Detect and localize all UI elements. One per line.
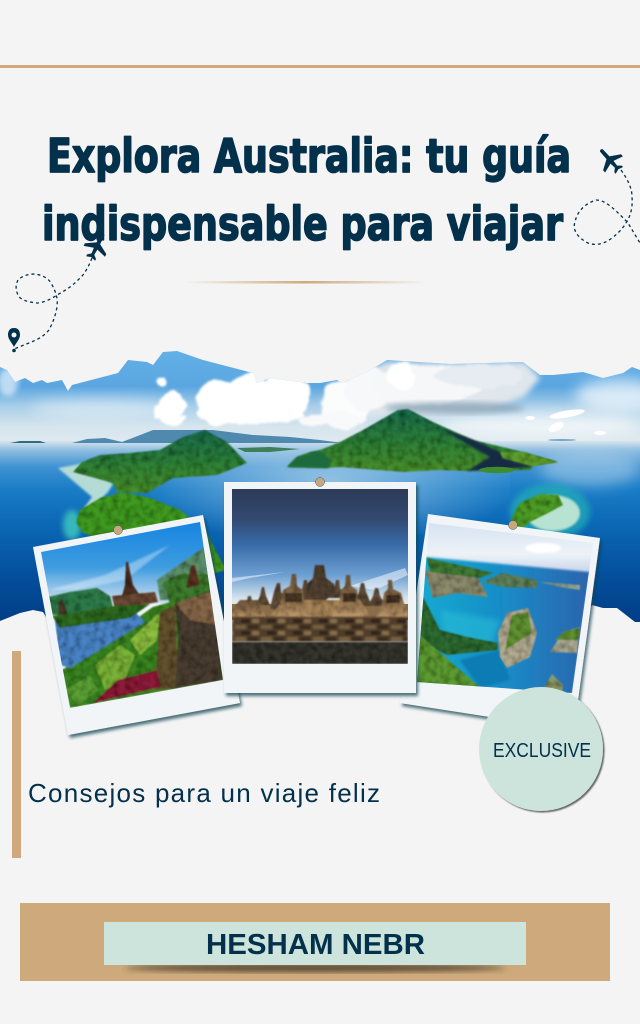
icon: right plane with dotted route: [574, 142, 640, 244]
left island with sand spit: [58, 430, 247, 540]
photo sky: [232, 489, 408, 604]
title divider: [185, 281, 427, 284]
photo sky: [425, 523, 593, 574]
photo card: sea cliffs: [400, 514, 600, 730]
badge: exclusive: [479, 687, 603, 811]
photo sky: [41, 522, 212, 604]
front island: [75, 492, 224, 574]
photo back stupas: [256, 580, 386, 612]
photo foliage highlights: [95, 645, 135, 690]
photo lattice holes: [285, 593, 400, 603]
author banner: [20, 903, 610, 981]
photo foliage base: [62, 590, 225, 708]
sea: [0, 441, 640, 631]
pin: [114, 526, 122, 534]
small reef island: [510, 484, 590, 540]
photo stupa base fill: [232, 604, 408, 620]
photo floor: [232, 642, 408, 664]
photo sea stack: [498, 608, 537, 668]
photo brick wall: [232, 617, 408, 642]
sky: [0, 345, 640, 445]
author banner: HESHAM NEBR: [206, 929, 425, 961]
accent bar: [12, 651, 21, 858]
photo hills and pagodas: [48, 588, 115, 615]
icon: left plane with dotted route and pin: [8, 228, 114, 352]
photo lake: [55, 612, 145, 668]
photo lattice stupas: [269, 574, 314, 617]
clouds: [153, 362, 606, 435]
photo sea: [410, 557, 590, 700]
volcano island: [287, 409, 558, 473]
top rule: [0, 65, 640, 68]
photo headlands: [425, 570, 488, 598]
subtitle: Consejos para un viaje feliz: [28, 778, 380, 808]
pin: [316, 478, 324, 486]
photo card: stupa temple: [224, 478, 416, 693]
sky haze and streaks: [0, 368, 640, 437]
photo flowers: [93, 670, 160, 703]
far islands: [10, 430, 576, 452]
panel: island landscape photo: [0, 345, 640, 631]
photo card: temple on lake: [33, 515, 240, 735]
photo foreground cliff: [418, 597, 498, 655]
photo main stupa: [307, 565, 335, 600]
pin: [508, 520, 518, 530]
photo path: [175, 590, 223, 688]
badge: exclusive: EXCLUSIVE: [493, 740, 591, 762]
title: [42, 129, 571, 251]
